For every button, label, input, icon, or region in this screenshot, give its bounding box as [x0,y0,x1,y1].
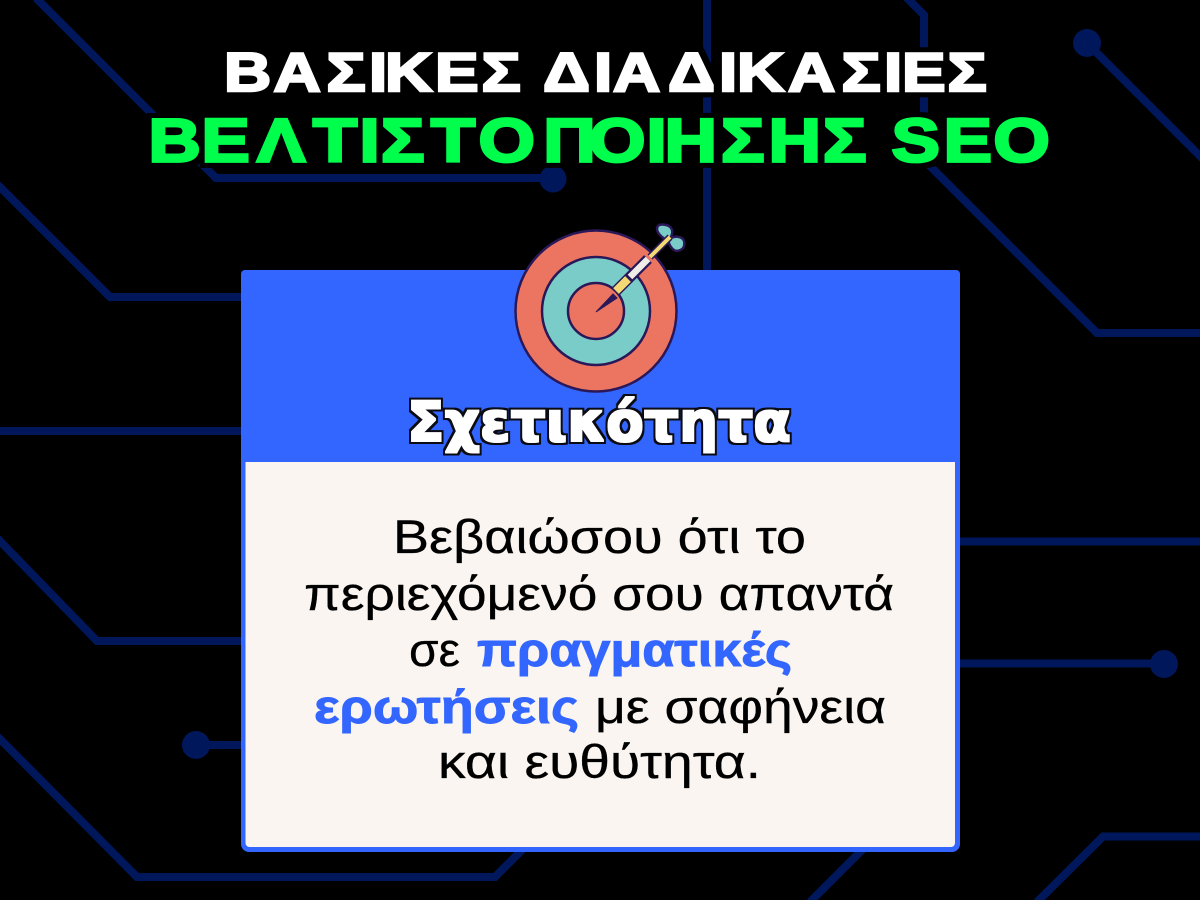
body text: σε [409,623,460,676]
heading: Σχετικότητα: Σχετικότητα [407,390,791,454]
icon: dartboard with dart [516,224,684,392]
title line 2: ΒΕΛΤΙΣΤΟΠΟΙΗΣΗΣ SEO [149,107,1050,175]
body text: πραγματικές [477,623,792,676]
body text [304,510,894,788]
card body background [246,462,955,847]
title [149,42,1050,175]
body text: και ευθύτητα. [438,735,761,788]
card blue frame [241,270,960,852]
body text: περιεχόμενό σου απαντά [304,567,894,620]
body text: ερωτήσεις [314,680,579,733]
title line 1: ΒΑΣΙΚΕΣ ΔΙΑΔΙΚΑΣΙΕΣ [224,42,987,103]
body text: Βεβαιώσου ότι το [393,510,806,563]
body text: με σαφήνεια [595,680,886,733]
panel: card [241,224,960,852]
